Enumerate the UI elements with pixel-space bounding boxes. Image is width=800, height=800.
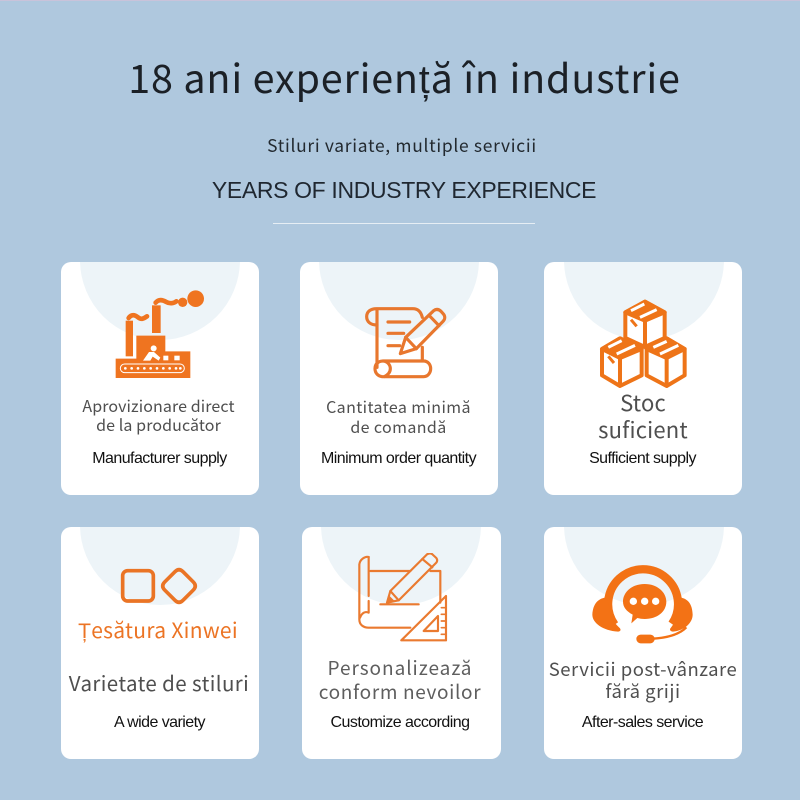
- label: worry free: fără griji: [605, 678, 681, 704]
- panel: manufacturer supply: [61, 262, 259, 495]
- panel: wide variety: [61, 527, 259, 759]
- label: personalize: Personalizează: [328, 654, 472, 681]
- panel: after-sales: [544, 527, 742, 759]
- label: variety: Varietate de stiluri: [69, 667, 249, 697]
- label: order: de comandă: [350, 414, 447, 438]
- label: brand: Țesătura Xinwei: [78, 615, 238, 645]
- label: stock: Stoc: [620, 386, 666, 418]
- label: producer: de la producător: [96, 412, 221, 436]
- subtitle: Stiluri variate, multiple servicii: [267, 133, 537, 158]
- title: 18 ani experiență în industrie: [128, 48, 681, 105]
- english label: Sufficient supply: [589, 450, 696, 467]
- english label: Minimum order quantity: [321, 450, 476, 467]
- panel: customize: [302, 527, 501, 759]
- english subtitle: YEARS OF INDUSTRY EXPERIENCE: [212, 177, 596, 203]
- english label: Manufacturer supply: [92, 450, 227, 467]
- label: direct supply: Aprovizionare direct: [82, 393, 235, 417]
- english label: Customize according: [331, 714, 469, 731]
- panel: sufficient supply: [544, 262, 742, 495]
- panel: minimum order: [300, 262, 498, 495]
- icon: scroll and pencil: [365, 307, 446, 378]
- icon: headset with chat bubble: [592, 565, 693, 644]
- icon: blueprint, pencil and set square: [358, 553, 448, 642]
- english label: A wide variety: [114, 714, 205, 731]
- label: according to needs: conform nevoilor: [319, 678, 481, 705]
- icon: square and diamond: [120, 568, 198, 604]
- icon: boxes: [600, 300, 687, 388]
- label: after-sales services: Servicii post-vânzare: [549, 656, 737, 682]
- english label: After-sales service: [582, 714, 703, 731]
- label: sufficient: suficient: [598, 413, 688, 445]
- icon: factory: [116, 290, 204, 378]
- label: minimum quantity: Cantitatea minimă: [326, 394, 471, 418]
